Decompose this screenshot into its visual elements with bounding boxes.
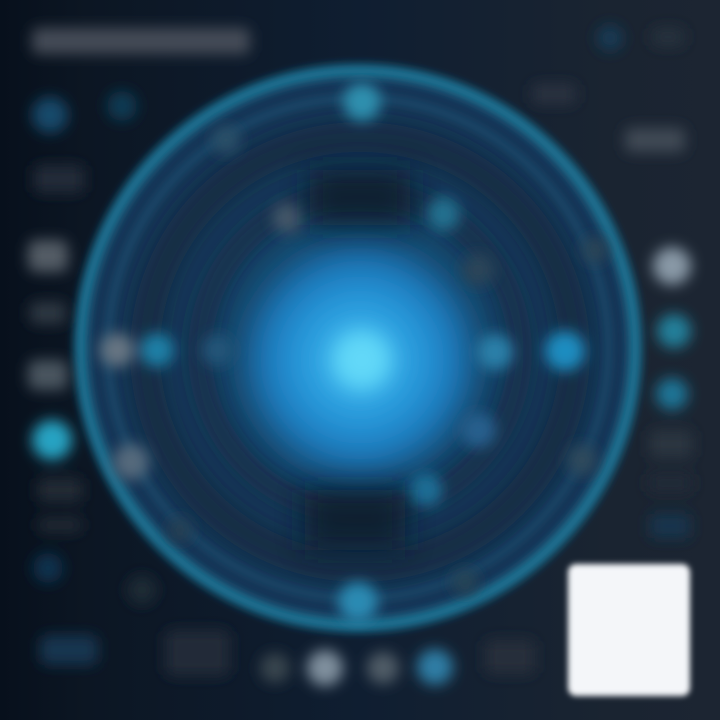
- circular diagram: [80, 70, 636, 626]
- right indicators: [653, 247, 691, 285]
- left column: [28, 91, 157, 665]
- white card: [568, 564, 690, 696]
- bottom row: [165, 630, 535, 686]
- left icons: [32, 97, 68, 133]
- inner ring: [108, 98, 608, 598]
- outer ring: [81, 71, 635, 625]
- ring nodes: [100, 83, 608, 622]
- disc: [80, 70, 636, 626]
- central bright core: [334, 332, 390, 388]
- right column: [532, 25, 692, 538]
- top right icons: [597, 25, 623, 51]
- central glow: [234, 234, 486, 486]
- title: [32, 28, 250, 54]
- dark inner rings: [145, 137, 575, 567]
- dark segments: [305, 170, 410, 550]
